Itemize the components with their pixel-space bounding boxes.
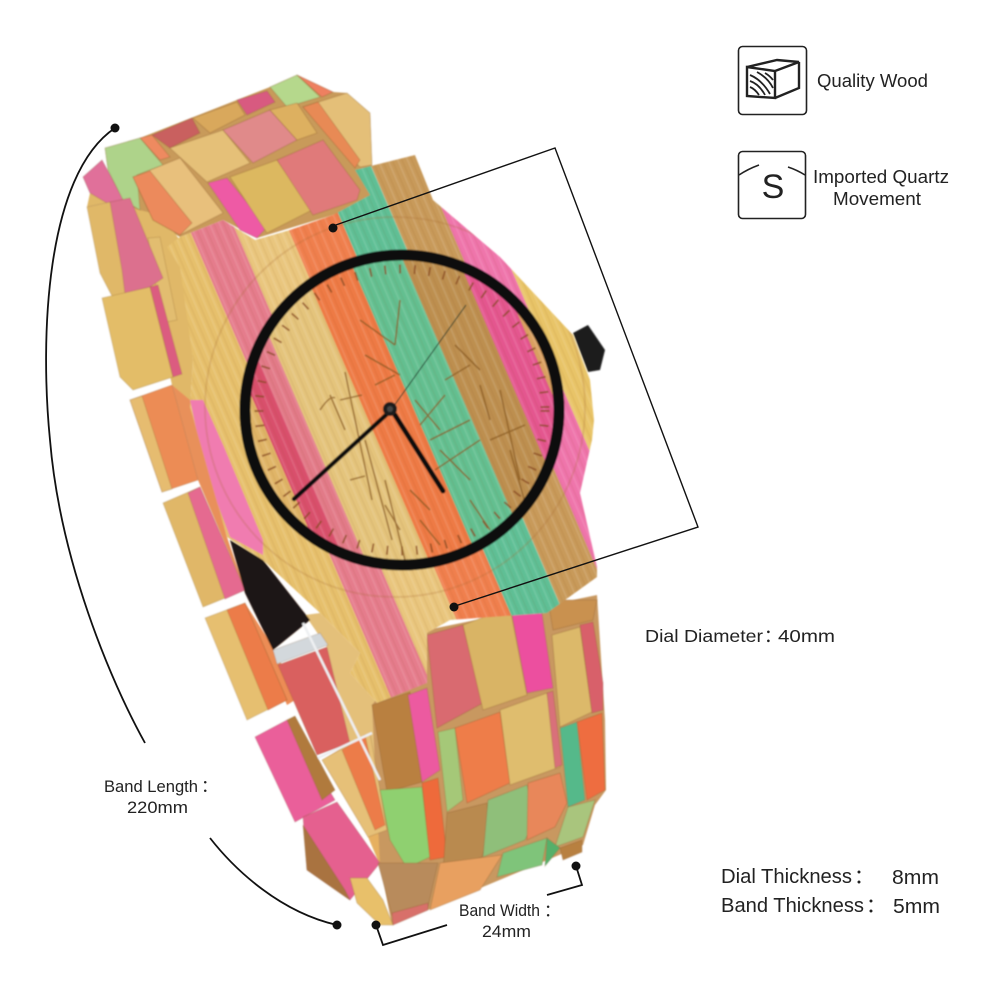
dial diameter label: ：: [764, 626, 782, 646]
thickness specs: ：: [866, 895, 886, 917]
hot pink case stripe: [190, 400, 263, 555]
watch case: [169, 154, 598, 704]
band length label: 220mm: [127, 798, 188, 817]
bamboo engraving: [320, 300, 530, 560]
label: quartz movement: Movement: [833, 189, 921, 209]
watch photo: [82, 74, 607, 926]
band length label: [104, 777, 218, 817]
icon: quartz movement: [738, 152, 806, 218]
bezel edge: [205, 217, 585, 597]
band length label: Band Length: [104, 777, 198, 796]
dial face: [249, 259, 555, 561]
band length label: ：: [201, 777, 218, 796]
band: upper links: [83, 75, 372, 238]
callout lines: dial diameter: [328, 148, 698, 612]
thickness specs: Dial Thickness: [721, 866, 852, 888]
dial diameter label: 40mm: [778, 626, 835, 646]
label: quartz movement: [813, 167, 949, 209]
band: underlay filling joints: [87, 75, 606, 925]
band width label: [459, 902, 560, 941]
watch crown: [573, 325, 605, 372]
dial diameter label: Dial Diameter: [645, 626, 763, 646]
dial diameter label: [645, 626, 835, 646]
minute ticks: [259, 269, 545, 551]
dial ring: [245, 255, 559, 565]
label: quartz movement: Imported Quartz: [813, 167, 949, 187]
watch hands: [294, 305, 466, 499]
thickness specs: ：: [854, 866, 874, 888]
band width label: 24mm: [482, 923, 531, 941]
spring bar and strap highlight: [303, 623, 380, 780]
thickness specs: Band Thickness: [721, 895, 864, 917]
thickness specs: 5mm: [893, 896, 940, 918]
band width label: Band Width: [459, 902, 540, 920]
band: right links: [350, 600, 605, 925]
band width label: ：: [544, 902, 560, 920]
band: left links: [87, 198, 387, 900]
label: quality wood: Quality Wood: [817, 70, 928, 91]
icon: quality wood: [738, 46, 806, 114]
band length arcs: [46, 124, 342, 930]
icon: quartz movement: S: [762, 168, 784, 206]
band width bracket: [372, 862, 582, 945]
thickness specs: 8mm: [892, 867, 939, 889]
thickness specs: [721, 866, 940, 918]
